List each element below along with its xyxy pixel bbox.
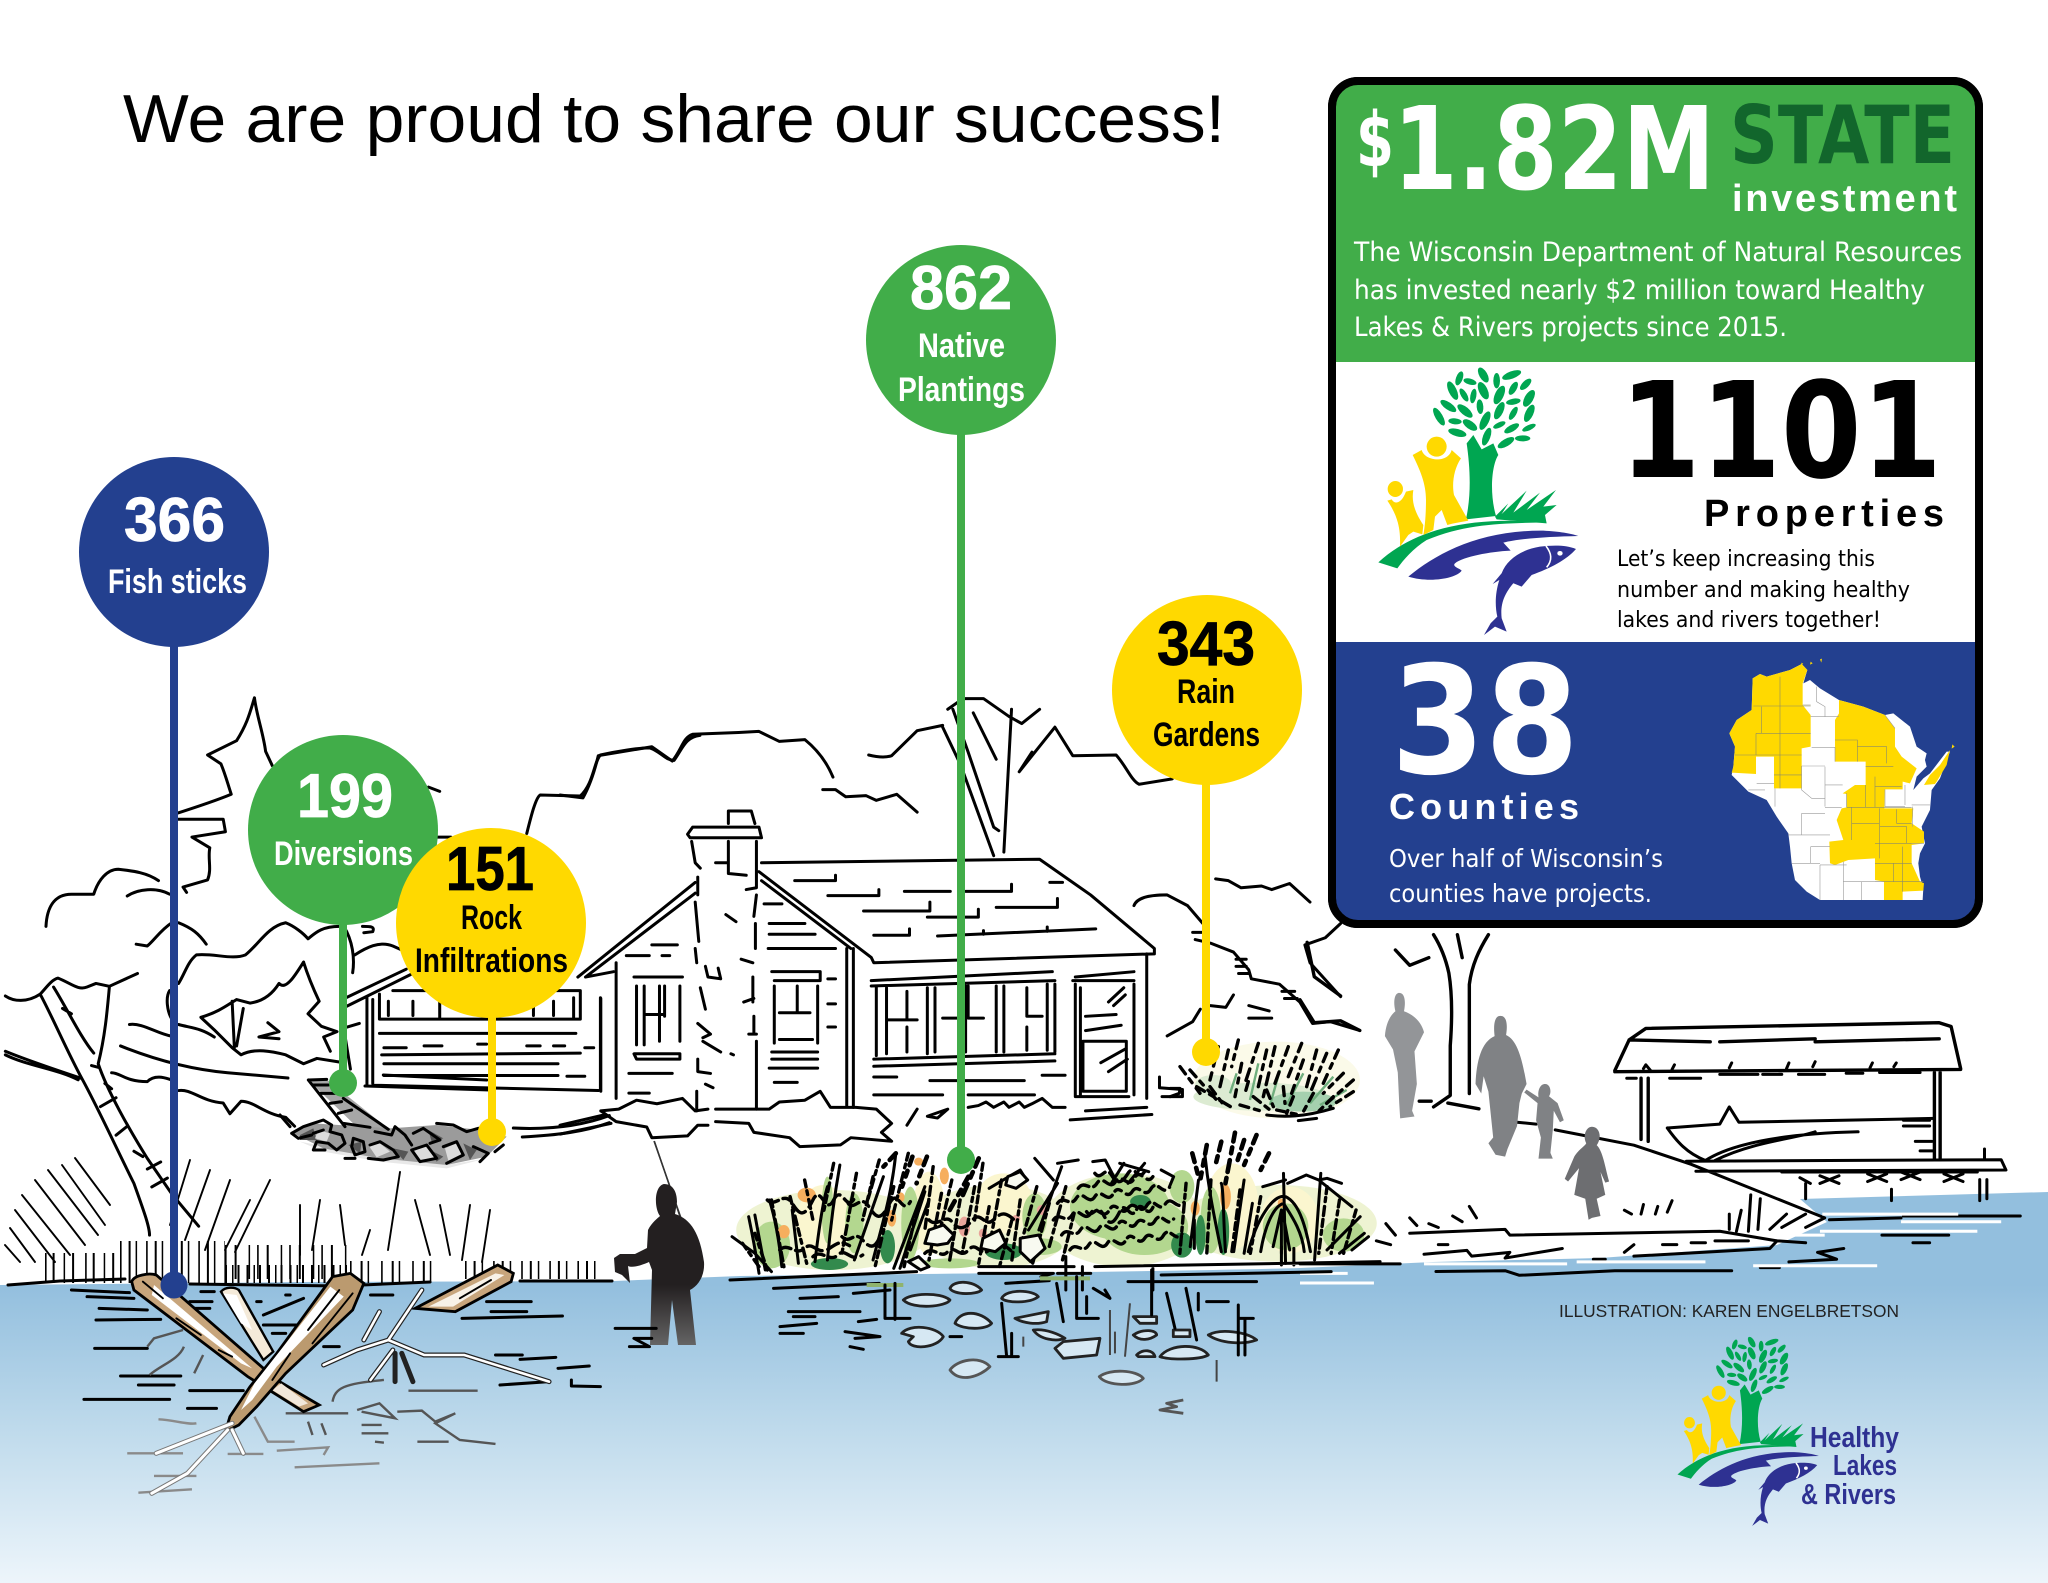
marker: 151 rock infiltrations: Rock — [461, 899, 522, 937]
left trees and garage — [5, 698, 700, 1235]
panel: properties — [1336, 355, 1975, 642]
panel: properties: Properties — [1704, 493, 1944, 535]
marker: 862 native plantings: 862 — [910, 254, 1012, 323]
marker: 862 native plantings — [866, 245, 1056, 1174]
illustration: house, trees and lawn line art — [5, 698, 2020, 1283]
marker: 862 native plantings: Native — [918, 327, 1005, 365]
marker: 366 fish sticks: Fish sticks — [108, 563, 247, 601]
rock infiltration and diversion channel — [280, 1075, 507, 1168]
title: We are proud to share our success! — [123, 81, 1225, 157]
panel: state investment: has invested nearly $2 million toward Healthy — [1354, 275, 1925, 306]
marker: 862 native plantings: Plantings — [898, 371, 1025, 409]
marker: 151 rock infiltrations — [396, 828, 586, 1146]
logo: Healthy Lakes and Rivers — [1677, 1336, 1899, 1526]
shoreline grass — [5, 1158, 612, 1286]
panel: counties — [1336, 635, 1975, 928]
marker: 366 fish sticks: 366 — [124, 486, 225, 555]
marker: 151 rock infiltrations: 151 — [446, 835, 534, 904]
panel: state investment: STATE — [1730, 89, 1955, 182]
map: Wisconsin counties with projects — [1729, 659, 1955, 900]
marker: 343 rain gardens: 343 — [1157, 610, 1255, 679]
panel: counties: Counties — [1389, 786, 1579, 827]
panel: state investment: Lakes & Rivers projects since 2015. — [1354, 312, 1787, 343]
logo: Healthy Lakes and Rivers: & Rivers — [1801, 1479, 1896, 1511]
panel: properties: 1101 — [1620, 355, 1942, 509]
icon: Healthy Lakes and Rivers logo — [1378, 366, 1578, 635]
panel: statewide results — [1328, 77, 1983, 928]
panel: counties: 38 — [1391, 635, 1579, 809]
panel: state investment: $ — [1356, 95, 1394, 184]
native plantings along the shore — [730, 1133, 1380, 1290]
panel: properties: number and making healthy — [1617, 577, 1910, 603]
panel: counties: Over half of Wisconsin’s — [1389, 844, 1663, 873]
marker: 343 rain gardens — [1112, 595, 1302, 1066]
fish sticks logs in the water — [71, 1265, 656, 1493]
marker: 343 rain gardens: Rain — [1177, 673, 1235, 711]
panel: counties: counties have projects. — [1389, 879, 1652, 908]
logo: Healthy Lakes and Rivers: Lakes — [1833, 1450, 1897, 1482]
marker: 366 fish sticks — [79, 457, 269, 1298]
illustration credit: ILLUSTRATION: KAREN ENGELBRETSON — [1559, 1301, 1899, 1321]
marker: 199 diversions — [248, 735, 438, 1097]
panel: state investment — [1336, 83, 1975, 362]
marker: 199 diversions: 199 — [297, 762, 393, 831]
panel: state investment: The Wisconsin Department of Natural Resources — [1353, 237, 1962, 268]
lake water — [0, 1192, 2048, 1583]
right trees, people and boathouse — [1300, 935, 2020, 1283]
panel: state investment: 1.82M — [1393, 83, 1715, 217]
logo: Healthy Lakes and Rivers: Healthy — [1810, 1422, 1899, 1454]
panel: properties: Let’s keep increasing this — [1617, 546, 1875, 572]
marker: 151 rock infiltrations: Infiltrations — [415, 942, 568, 980]
fisherman silhouette — [614, 1141, 704, 1345]
lily pads and water plants — [780, 1270, 1257, 1413]
rear rain garden — [1170, 1040, 1360, 1121]
marker: 199 diversions: Diversions — [274, 835, 413, 873]
panel: properties: lakes and rivers together! — [1617, 607, 1881, 633]
house — [560, 699, 1360, 1216]
marker: 343 rain gardens: Gardens — [1153, 716, 1260, 754]
icon: logo mark — [1677, 1336, 1819, 1526]
panel: state investment: investment — [1732, 178, 1957, 220]
